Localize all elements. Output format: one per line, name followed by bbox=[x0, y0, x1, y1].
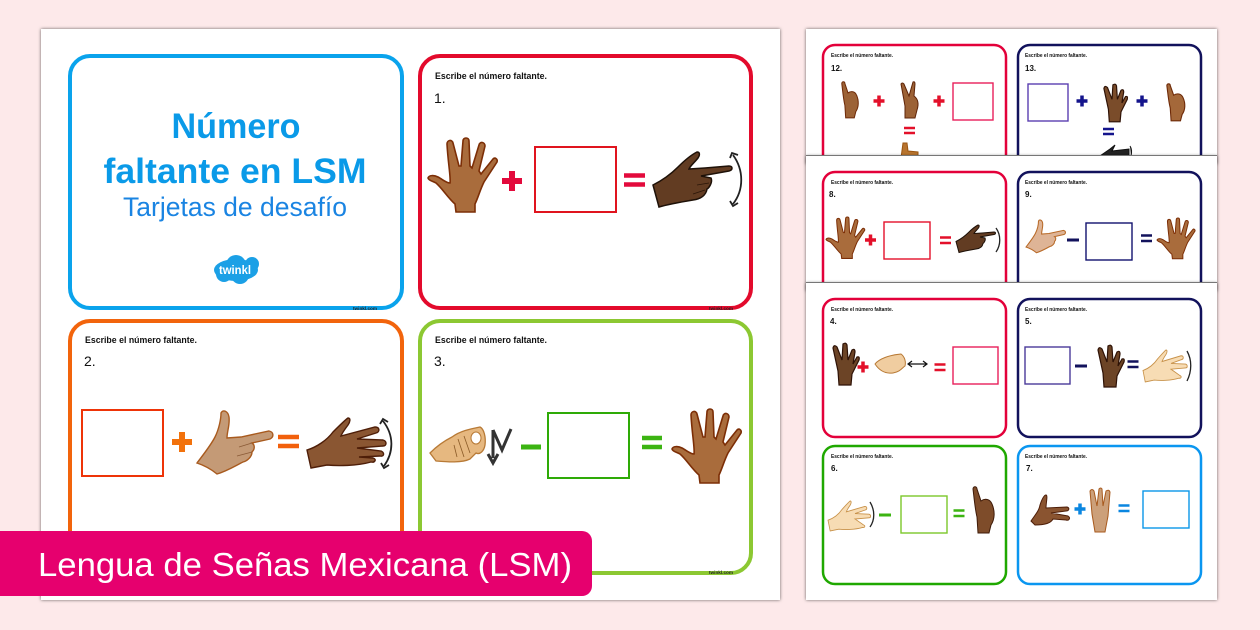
footer: twinkl.com: twinkl.com bbox=[353, 306, 377, 311]
plus sign bbox=[934, 96, 944, 106]
question number: 8. bbox=[829, 190, 836, 199]
equals sign bbox=[1141, 236, 1152, 241]
icon: pinching hand bbox=[430, 427, 485, 462]
panel: card 7 bbox=[1018, 446, 1201, 584]
minus sign bbox=[879, 514, 891, 516]
plus sign bbox=[858, 362, 868, 372]
icon: twinkl logo cloud: twinkl bbox=[219, 263, 251, 277]
question number: 6. bbox=[831, 464, 838, 473]
icon: pale hand bbox=[828, 501, 871, 531]
arrow: horizontal double bbox=[908, 361, 927, 367]
icon: twinkl logo cloud bbox=[214, 255, 259, 284]
panel: card 5 bbox=[1018, 299, 1201, 437]
plus sign bbox=[1136, 96, 1148, 106]
plus sign bbox=[1074, 504, 1086, 514]
icon: index finger hand bbox=[973, 487, 994, 533]
panel: middle worksheet sheet, cards 8 and 9 bbox=[806, 156, 1217, 312]
answer box bbox=[82, 410, 163, 476]
icon: three fingers hand bbox=[307, 418, 386, 468]
subtitle: Tarjetas de desafío bbox=[123, 192, 347, 222]
icon: open hand bbox=[1104, 84, 1128, 122]
icon: index finger hand bbox=[842, 82, 858, 118]
heading: faltante en LSM: faltante en LSM bbox=[104, 152, 366, 191]
instruction text: Escribe el número faltante. bbox=[1025, 307, 1088, 313]
question number: 9. bbox=[1025, 190, 1032, 199]
minus sign bbox=[521, 444, 541, 450]
question number: 1. bbox=[434, 90, 446, 106]
answer box bbox=[1028, 84, 1068, 121]
equals sign bbox=[1128, 362, 1138, 367]
instruction text: Escribe el número faltante. bbox=[831, 180, 894, 186]
icon: dark hand bbox=[1098, 345, 1124, 387]
answer box bbox=[1143, 491, 1189, 528]
arrow: movement curve bbox=[1187, 351, 1191, 381]
arrow: movement curve bbox=[730, 153, 741, 206]
icon: pale hand bbox=[1143, 350, 1187, 382]
answer box bbox=[901, 496, 947, 533]
instruction text: Escribe el número faltante. bbox=[831, 454, 894, 460]
equals sign bbox=[624, 176, 645, 184]
plus sign bbox=[1076, 96, 1088, 106]
icon: two fingers hand bbox=[901, 82, 918, 118]
panel: card 13 bbox=[1018, 45, 1201, 185]
panel: front worksheet sheet, cards 4 to 7 bbox=[806, 283, 1217, 600]
question number: 3. bbox=[434, 353, 446, 369]
minus sign bbox=[1067, 238, 1079, 242]
panel: card 12 bbox=[823, 45, 1006, 185]
instruction text: Escribe el número faltante. bbox=[831, 53, 894, 59]
panel: title card bbox=[70, 56, 402, 311]
icon: open hand bbox=[672, 409, 741, 483]
question number: 12. bbox=[831, 64, 842, 73]
arrow: movement curve bbox=[380, 419, 391, 468]
minus sign bbox=[1075, 364, 1087, 368]
answer box bbox=[535, 147, 616, 212]
arrow: movement curve bbox=[870, 502, 874, 527]
heading: Número: Número bbox=[172, 107, 300, 146]
icon: partly hidden hand bbox=[901, 143, 918, 158]
banner: language label bbox=[0, 531, 592, 596]
banner: language label: Lengua de Señas Mexicana (LSM) bbox=[38, 546, 572, 583]
icon: partly hidden pointing hand bbox=[1097, 145, 1132, 158]
icon: fist hand bbox=[875, 354, 905, 373]
instruction text: Escribe el número faltante. bbox=[831, 307, 894, 313]
arrow: zigzag down bbox=[488, 429, 511, 463]
icon: index finger hand bbox=[1167, 84, 1185, 121]
icon: pointing hand with thumb bbox=[197, 411, 273, 474]
panel: card 8 bbox=[823, 172, 1006, 312]
question number: 13. bbox=[1025, 64, 1036, 73]
answer box bbox=[953, 347, 998, 384]
plus sign bbox=[172, 432, 192, 452]
panel: card 6 bbox=[823, 446, 1006, 584]
instruction text: Escribe el número faltante. bbox=[1025, 454, 1088, 460]
panel: main worksheet sheet bbox=[41, 29, 780, 600]
answer box bbox=[1086, 223, 1132, 260]
icon: open hand bbox=[826, 217, 865, 258]
plus sign bbox=[502, 171, 522, 191]
answer box bbox=[548, 413, 629, 478]
panel: card 4 bbox=[823, 299, 1006, 437]
icon: sideways hand bbox=[1031, 495, 1069, 525]
icon: pointing hand with thumb bbox=[1026, 220, 1065, 253]
equals sign bbox=[1118, 506, 1130, 511]
panel: card 9 bbox=[1018, 172, 1201, 312]
instruction text: Escribe el número faltante. bbox=[1025, 53, 1088, 59]
equals sign bbox=[1103, 129, 1114, 134]
instruction text: Escribe el número faltante. bbox=[435, 71, 547, 81]
answer box bbox=[953, 83, 993, 120]
icon: pointing hand bbox=[956, 225, 996, 252]
equals sign bbox=[278, 437, 299, 446]
icon: open hand bbox=[428, 138, 497, 212]
plus sign bbox=[874, 96, 884, 106]
panel: card 3 bbox=[420, 321, 751, 575]
instruction text: Escribe el número faltante. bbox=[85, 335, 197, 345]
answer box bbox=[884, 222, 930, 259]
question number: 5. bbox=[1025, 317, 1032, 326]
equals sign bbox=[954, 510, 964, 516]
panel: card 1 bbox=[420, 56, 751, 311]
icon: dark hand bbox=[833, 343, 859, 385]
instruction text: Escribe el número faltante. bbox=[435, 335, 547, 345]
icon: three fingers up hand bbox=[1090, 488, 1110, 532]
instruction text: Escribe el número faltante. bbox=[1025, 180, 1088, 186]
icon: pointing hand bbox=[653, 152, 732, 207]
answer box bbox=[1025, 347, 1070, 384]
question number: 2. bbox=[84, 353, 96, 369]
equals sign bbox=[642, 438, 662, 447]
footer: twinkl.com: twinkl.com bbox=[709, 306, 733, 311]
plus sign bbox=[865, 234, 876, 246]
panel: back worksheet sheet, cards 12 and 13 bbox=[806, 29, 1217, 185]
equals sign bbox=[904, 128, 915, 133]
equals sign bbox=[940, 238, 951, 243]
question number: 7. bbox=[1026, 464, 1033, 473]
equals sign bbox=[934, 364, 946, 370]
arrow: movement curve bbox=[996, 228, 1000, 252]
footer: twinkl.com: twinkl.com bbox=[709, 570, 733, 575]
question number: 4. bbox=[830, 317, 837, 326]
icon: open hand bbox=[1157, 218, 1195, 259]
panel: card 2 bbox=[70, 321, 402, 573]
